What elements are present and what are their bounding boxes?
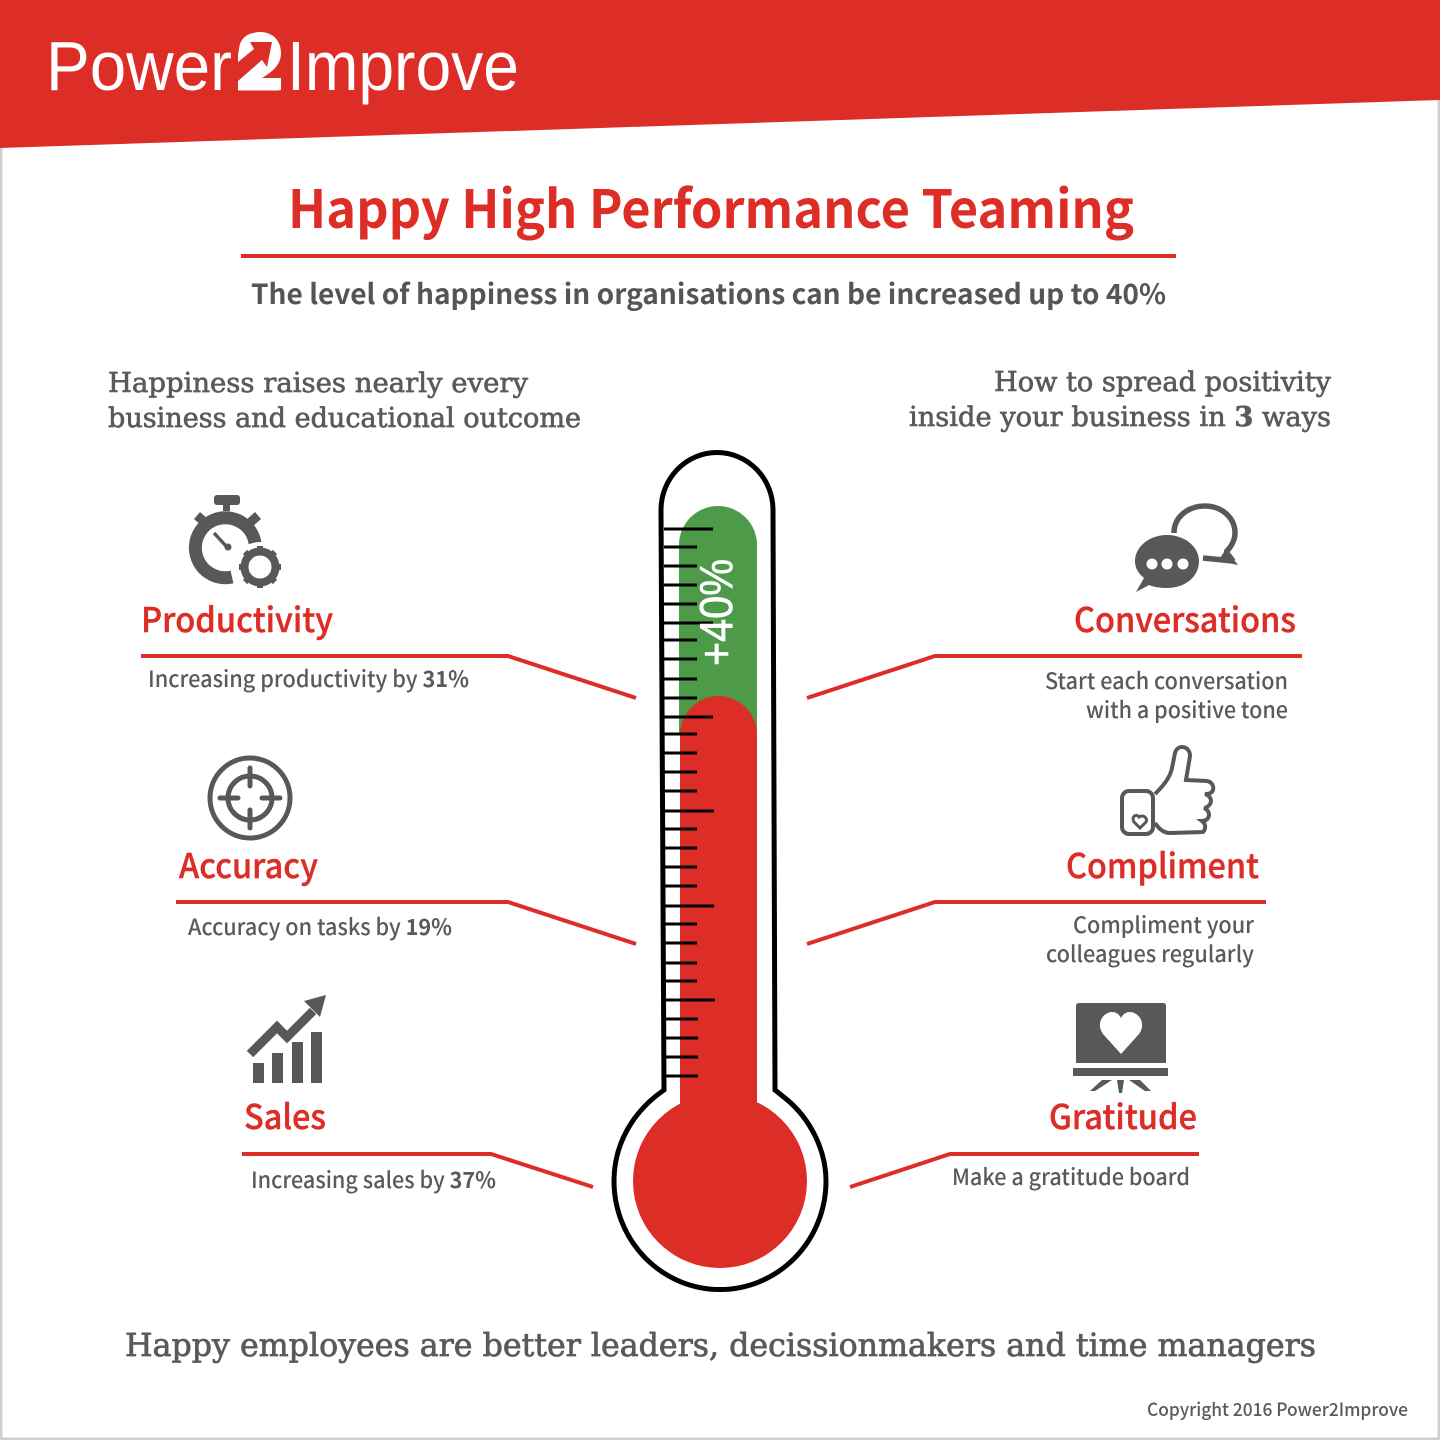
+40% label: +40% [690,559,742,666]
logo: Power2Improve: Improve [287,27,519,105]
green +40% fill [679,506,757,735]
right column intro: inside your business in 3 ways [909,402,1331,433]
logo: Power2Improve: Power [46,27,232,105]
text: conversations advice: with a positive tone [1086,693,1288,725]
text: compliment advice [1046,908,1255,969]
icon: stopwatch with gear [194,495,285,592]
right column intro: How to spread positivity [994,367,1332,398]
text: compliment advice: colleagues regularly [1046,937,1254,969]
icon: speech bubbles [1135,506,1238,592]
title: Happy High Performance Teaming [288,168,1134,244]
text: sales stat: Increasing sales by 37% [251,1163,496,1195]
logo: Power2Improve [46,17,519,108]
text: productivity stat: Increasing productivity by 31% [148,662,469,694]
text: conversations advice: Start each conversation [1045,664,1288,696]
left column intro [108,368,581,434]
thermometer outline [614,452,826,1290]
right column intro [909,367,1332,433]
icon: gratitude board with heart [1073,1003,1168,1093]
panel: compliment [807,747,1266,969]
scale ticks [664,529,715,1076]
heading: Gratitude: Gratitude [1049,1090,1197,1139]
text: gratitude advice: Make a gratitude board [952,1160,1190,1192]
text: conversations advice [1045,664,1288,725]
icon: rising bar chart [250,995,326,1083]
left column intro: Happiness raises nearly every [108,368,529,399]
panel: sales [242,995,593,1195]
heading: Productivity: Productivity [141,593,333,642]
heading: Compliment: Compliment [1066,839,1259,888]
footer statement: Happy employees are better leaders, decissionmakers and time managers [125,1326,1316,1364]
left column intro: business and educational outcome [108,403,581,434]
copyright: Copyright 2016 Power2Improve [1147,1396,1408,1422]
header banner with logo [0,0,1440,148]
logo: Power2Improve: 2 [236,17,282,108]
panel: accuracy [176,758,636,944]
text: accuracy stat: Accuracy on tasks by 19% [188,910,452,942]
heading: Sales: Sales [244,1090,326,1139]
panel: conversations [807,506,1302,725]
heading: Accuracy: Accuracy [179,839,318,888]
panel: productivity [141,495,636,698]
heading: Conversations: Conversations [1074,593,1296,642]
thermometer [614,452,826,1290]
icon: target [210,758,290,838]
subtitle: The level of happiness in organisations can be increased up to 40% [251,273,1166,313]
red mercury column and bulb [680,696,757,1110]
panel: gratitude [850,1003,1199,1192]
icon: thumbs up with heart [1122,747,1213,834]
text: compliment advice: Compliment your [1073,908,1255,940]
